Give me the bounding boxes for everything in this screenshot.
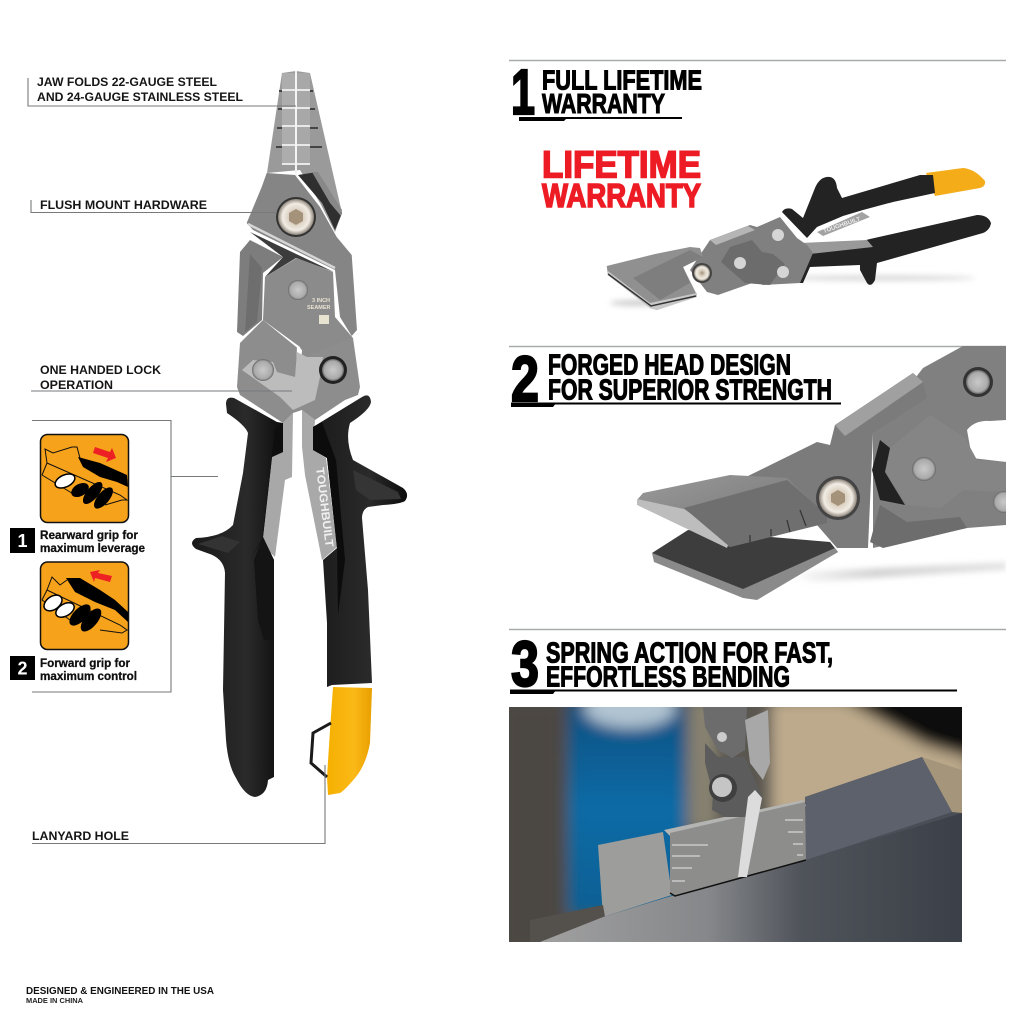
seamer jaw <box>664 800 806 838</box>
heading underline <box>510 690 957 694</box>
jaw triangle <box>267 71 342 232</box>
callout: flush mount hardware: FLUSH MOUNT HARDWARE <box>40 198 207 212</box>
heading: EFFORTLESS BENDING <box>546 662 790 694</box>
heading: SPRING ACTION FOR FAST, <box>546 638 833 670</box>
step 2 text <box>40 657 137 683</box>
hexagon centre plate <box>263 258 353 357</box>
photo: bending sheet metal <box>509 707 962 942</box>
heading underline <box>511 402 841 407</box>
slot between plates <box>296 345 302 380</box>
step 1 text: maximum leverage <box>40 542 146 555</box>
grip panel <box>10 420 218 692</box>
callout: one handed lock: OPERATION <box>40 378 113 392</box>
lower head plate <box>237 320 360 423</box>
step 1 badge: 1 <box>17 531 28 551</box>
panel: spring action <box>500 628 1006 950</box>
left silver shaft <box>260 413 293 557</box>
number 3: 3 <box>511 628 539 700</box>
lifetime warranty logo <box>542 144 701 215</box>
right silver shaft with brand <box>302 410 337 560</box>
lanyard loop <box>311 723 331 777</box>
footer: DESIGNED & ENGINEERED IN THE USA <box>26 985 214 997</box>
silver locking latch <box>242 352 323 410</box>
callout: jaw folds <box>28 75 296 106</box>
yellow grip <box>327 687 372 795</box>
centre rivet <box>288 280 308 300</box>
lifetime warranty logo: LIFETIME <box>542 144 701 186</box>
step 2 text: maximum control <box>40 670 137 683</box>
3 inch seamer marking: SEAMER <box>307 305 331 311</box>
lock rivets <box>252 356 347 384</box>
heading: FOR SUPERIOR STRENGTH <box>548 374 832 406</box>
lifetime warranty logo: WARRANTY <box>542 178 701 215</box>
step 2 badge <box>10 656 35 680</box>
heading <box>542 64 702 119</box>
number 2: 2 <box>511 343 539 415</box>
callout: flush mount hardware <box>31 198 277 212</box>
panel: forged head <box>509 343 1015 600</box>
flush mount bolt <box>276 197 316 237</box>
callout: jaw folds: JAW FOLDS 22-GAUGE STEEL <box>37 75 218 89</box>
step 2 badge: 2 <box>17 658 28 678</box>
step 2 text: Forward grip for <box>40 657 130 670</box>
tool photo: seamer side view: TOUGHBUILT <box>823 216 862 235</box>
heading: FULL LIFETIME <box>542 64 702 96</box>
icon: rearward grip <box>40 434 128 522</box>
metal sheet <box>805 757 962 858</box>
right silver shaft with brand: TOUGHBUILT <box>313 467 335 548</box>
3 inch seamer marking: 3 INCH <box>312 298 330 304</box>
heading: WARRANTY <box>542 88 665 119</box>
tool photo: head close-up <box>637 346 1015 600</box>
callout: jaw folds: AND 24-GAUGE STAINLESS STEEL <box>37 90 244 104</box>
callout: one handed lock <box>31 363 292 392</box>
callout: lanyard hole <box>32 765 325 844</box>
panel: lifetime warranty <box>509 56 1006 310</box>
left black handle <box>192 398 283 797</box>
step 1 badge <box>10 528 35 553</box>
footer: MADE IN CHINA <box>26 998 83 1005</box>
number 1: 1 <box>511 56 535 128</box>
heading underline <box>519 117 682 121</box>
main tool: seamer front view <box>192 71 407 797</box>
tool photo: seamer side view <box>607 168 991 310</box>
seamer arm <box>705 743 762 817</box>
left side link <box>237 240 283 336</box>
heading <box>548 350 832 406</box>
callout: lanyard hole: LANYARD HOLE <box>32 829 129 843</box>
callout: one handed lock: ONE HANDED LOCK <box>40 363 161 377</box>
heading: FORGED HEAD DESIGN <box>548 350 791 382</box>
step 1 text <box>40 529 146 555</box>
footer <box>26 985 214 1005</box>
icon: forward grip <box>40 562 128 650</box>
upper head plate <box>247 173 357 336</box>
3 inch seamer marking <box>307 298 331 324</box>
step 1 text: Rearward grip for <box>40 529 138 542</box>
right black handle <box>313 395 407 687</box>
heading <box>546 638 833 694</box>
